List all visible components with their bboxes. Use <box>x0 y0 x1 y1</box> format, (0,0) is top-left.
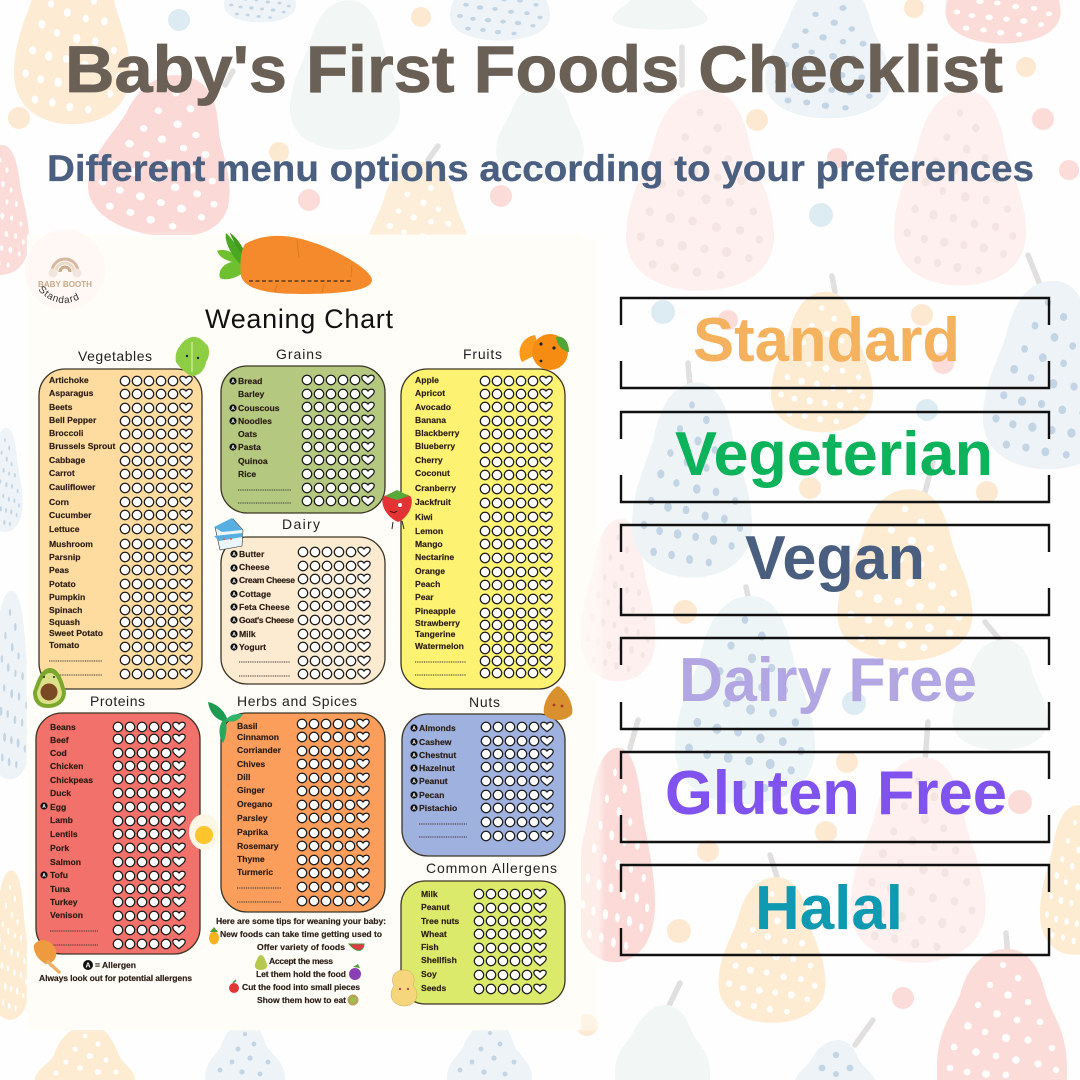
fruits item names: Orange <box>415 566 445 576</box>
herbs item names: Thyme <box>237 854 265 864</box>
heading: vegetables: Vegetables <box>78 348 152 364</box>
vegetables item names: Cauliflower <box>49 482 96 492</box>
allergen legend: Always look out for potential allergens <box>39 973 192 983</box>
proteins item names: Chicken <box>50 761 83 771</box>
allergens item names: Soy <box>421 969 437 979</box>
vegetables item names: Cucumber <box>49 510 92 520</box>
panel: grains <box>221 346 385 513</box>
icon: pineapple <box>209 927 219 944</box>
herbs tracking rows <box>297 719 369 906</box>
nuts item names: Hazelnut <box>419 763 455 773</box>
herbs item names: Chives <box>237 759 265 769</box>
herbs item names: Dill <box>237 772 250 782</box>
proteins item names: Egg <box>50 802 66 812</box>
option: standard: Standard <box>693 306 960 375</box>
vegetables item names: Beets <box>49 402 73 412</box>
proteins item names: Venison <box>50 910 83 920</box>
grains item names: Noodles <box>238 416 272 426</box>
vegetables item names: Potato <box>49 579 76 589</box>
dairy item names: Cream Cheese <box>239 575 295 585</box>
fruits item names: Lemon <box>415 526 443 536</box>
dairy item names: Cheese <box>239 562 270 572</box>
herbs item names: Basil <box>237 721 258 731</box>
fruits item names: Coconut <box>415 468 450 478</box>
vegetables item names: Asparagus <box>49 388 94 398</box>
fruits item names: Pineapple <box>415 606 456 616</box>
grains item names: A <box>231 419 235 425</box>
fruits item names: Cherry <box>415 455 443 465</box>
vegetables item names: Sweet Potato <box>49 628 103 638</box>
vegetables item names: Spinach <box>49 605 82 615</box>
grains item names: A <box>231 445 235 451</box>
nuts item names: A <box>412 726 416 732</box>
vegetables item names <box>49 375 116 675</box>
fruits item names: Apple <box>415 375 439 385</box>
nuts item names: Peanut <box>419 776 448 786</box>
vegetables item names: Tomato <box>49 640 79 650</box>
icon: strawberry <box>382 490 412 529</box>
panel: common allergens <box>401 860 565 1004</box>
proteins item names: Beans <box>50 722 76 732</box>
option: vegan: Vegan <box>745 524 925 593</box>
icon: orange <box>519 334 569 370</box>
option: gluten free: Gluten Free <box>665 759 1007 828</box>
allergens item names: Milk <box>421 889 438 899</box>
vegetables item names: Parsnip <box>49 552 81 562</box>
fruits item names: Banana <box>415 415 446 425</box>
dairy item names: A <box>232 552 236 558</box>
nuts item names: Pecan <box>419 790 444 800</box>
grains item names: A <box>231 379 235 385</box>
fruits item names: Strawberry <box>415 618 460 628</box>
option: gluten free <box>621 752 1049 842</box>
heading: herbs and spices: Herbs and Spices <box>237 693 357 709</box>
vegetables item names: Bell Pepper <box>49 415 97 425</box>
grains item names <box>229 376 291 503</box>
vegetables item names: Broccoli <box>49 428 83 438</box>
dairy item names: Milk <box>239 629 256 639</box>
weaning tips: Let them hold the food <box>256 969 346 979</box>
grains item names: Quinoa <box>238 456 268 466</box>
proteins item names: Lamb <box>50 815 73 825</box>
vegetables item names: Peas <box>49 565 69 575</box>
herbs item names: Corriander <box>237 745 282 755</box>
icon: kiwi <box>348 994 358 1006</box>
allergens item names: Peanut <box>421 902 450 912</box>
herbs item names: Ginger <box>237 785 265 795</box>
panel: dairy <box>221 516 385 684</box>
dairy item names: A <box>232 566 236 572</box>
option: vegeterian: Vegeterian <box>675 420 993 489</box>
allergens item names: Seeds <box>421 983 447 993</box>
herbs item names: Cinnamon <box>237 732 279 742</box>
weaning tips: Cut the food into small pieces <box>242 982 360 992</box>
heading: dairy: Dairy <box>282 516 320 532</box>
dairy item names: Cottage <box>239 589 271 599</box>
proteins tracking rows <box>113 722 185 949</box>
allergen legend: A <box>85 962 91 970</box>
weaning tips: Offer variety of foods <box>257 942 345 952</box>
vegetables tracking rows <box>120 376 192 679</box>
allergens item names: Tree nuts <box>421 916 459 926</box>
weaning chart sheet <box>25 230 602 1032</box>
icon: egg <box>189 814 219 850</box>
nuts item names: A <box>412 806 416 812</box>
nuts item names: A <box>412 740 416 746</box>
icon: almond <box>544 686 572 720</box>
nuts item names: Almonds <box>419 723 456 733</box>
fruits item names: Blueberry <box>415 441 455 451</box>
panel: fruits <box>401 346 565 689</box>
vegetables item names: Corn <box>49 497 69 507</box>
nuts item names: A <box>412 753 416 759</box>
dairy item names: A <box>232 592 236 598</box>
vegetables item names: Brussels Sprout <box>49 441 116 451</box>
option: standard <box>621 298 1049 388</box>
herbs item names: Rosemary <box>237 841 279 851</box>
allergen legend <box>39 960 192 983</box>
vegetables item names: Mushroom <box>49 539 93 549</box>
dairy item names: A <box>232 632 236 638</box>
vegetables item names: Squash <box>49 617 80 627</box>
nuts item names: A <box>412 766 416 772</box>
panel: nuts <box>402 694 565 856</box>
proteins item names <box>40 722 98 945</box>
fruits item names: Avocado <box>415 402 451 412</box>
icon: basil leaves <box>208 702 243 743</box>
grains item names: Bread <box>238 376 262 386</box>
proteins item names: Turkey <box>50 897 78 907</box>
dairy item names: A <box>232 618 236 624</box>
panel: herbs and spices <box>221 693 385 912</box>
herbs item names: Paprika <box>237 827 268 837</box>
grains tracking rows <box>302 375 374 506</box>
proteins item names: A <box>42 873 46 879</box>
fruits item names: Watermelon <box>415 641 464 651</box>
herbs item names: Turmeric <box>237 867 273 877</box>
proteins item names: Lentils <box>50 829 78 839</box>
vegetables item names: Carrot <box>49 468 75 478</box>
logo: baby booth standard <box>25 230 92 304</box>
heading: fruits: Fruits <box>463 346 502 362</box>
icon: avocado <box>33 668 66 708</box>
fruits item names: Nectarine <box>415 552 454 562</box>
fruits item names: Apricot <box>415 388 445 398</box>
fruits item names: Kiwi <box>415 512 433 522</box>
dairy item names: A <box>232 579 236 585</box>
dairy item names: Feta Cheese <box>239 602 290 612</box>
fruits item names: Pear <box>415 592 434 602</box>
grains item names: A <box>231 406 235 412</box>
allergens item names: Fish <box>421 942 439 952</box>
option: vegeterian <box>621 412 1049 502</box>
icon: watermelon <box>349 944 364 950</box>
nuts item names: Cashew <box>419 737 452 747</box>
weaning tips <box>216 916 386 1005</box>
icon: lettuce <box>176 337 209 376</box>
icon: carrot <box>217 232 372 294</box>
grains item names: Oats <box>238 429 257 439</box>
herbs item names: Oregano <box>237 799 272 809</box>
nuts item names <box>410 723 467 837</box>
proteins item names: Cod <box>50 748 67 758</box>
icon: grapes <box>349 964 361 980</box>
fruits item names: Peach <box>415 579 440 589</box>
heading: grains: Grains <box>276 346 322 362</box>
proteins item names: Salmon <box>50 857 81 867</box>
option: dairy free <box>621 638 1049 729</box>
dairy tracking rows <box>298 547 370 679</box>
allergen legend: = Allergen <box>95 960 136 970</box>
nuts item names: A <box>412 793 416 799</box>
weaning tips: Here are some tips for weaning your baby: <box>216 916 386 926</box>
icon: apple <box>229 980 239 993</box>
vegetables item names: Pumpkin <box>49 592 85 602</box>
herbs item names: Parsley <box>237 813 268 823</box>
allergens item names <box>421 889 459 993</box>
icon: pear <box>255 955 267 970</box>
icon: peanut <box>391 970 417 1006</box>
vegetables item names: Cabbage <box>49 455 86 465</box>
fruits item names <box>415 375 466 675</box>
icon: chicken leg <box>34 940 59 972</box>
panel: vegetables <box>39 348 202 689</box>
vegetables item names: Artichoke <box>49 375 89 385</box>
dairy item names: Yogurt <box>239 642 266 652</box>
allergens item names: Shellfish <box>421 955 457 965</box>
logo: baby booth standard: BABY BOOTH <box>38 280 92 289</box>
grains item names: Couscous <box>238 403 280 413</box>
icon: milk carton <box>214 518 243 550</box>
proteins item names: Tuna <box>50 884 70 894</box>
proteins item names: Duck <box>50 788 71 798</box>
nuts item names: A <box>412 779 416 785</box>
proteins item names: Pork <box>50 843 69 853</box>
heading: nuts: Nuts <box>469 694 500 710</box>
chart heading: Weaning Chart <box>205 304 393 334</box>
fruits item names: Tangerine <box>415 629 456 639</box>
allergens item names: Wheat <box>421 929 447 939</box>
dairy item names: A <box>232 645 236 651</box>
dairy item names: Goat's Cheese <box>239 615 294 625</box>
nuts item names: Pistachio <box>419 803 457 813</box>
dairy item names: A <box>232 605 236 611</box>
grains item names: Pasta <box>238 442 261 452</box>
option: dairy free: Dairy Free <box>679 646 977 715</box>
nuts item names: Chestnut <box>419 750 456 760</box>
fruits item names: Blackberry <box>415 428 460 438</box>
fruits item names: Mango <box>415 539 443 549</box>
allergens tracking rows <box>474 889 546 994</box>
option: vegan <box>621 524 1049 615</box>
heading: common allergens: Common Allergens <box>426 860 557 876</box>
grains item names: Barley <box>238 389 264 399</box>
fruits tracking rows <box>480 376 552 678</box>
heading: proteins: Proteins <box>90 693 145 709</box>
proteins item names: A <box>42 804 46 810</box>
title: Baby's First Foods Checklist <box>65 32 1003 106</box>
dairy item names <box>230 549 295 676</box>
fruits item names: Cranberry <box>415 483 456 493</box>
proteins item names: Beef <box>50 735 69 745</box>
logo: baby booth standard: Standard <box>39 286 79 304</box>
subtitle: Different menu options according to your preferences <box>47 148 1034 189</box>
nuts tracking rows <box>481 722 553 841</box>
proteins item names: Chickpeas <box>50 775 93 785</box>
weaning tips: Show them how to eat <box>257 995 346 1005</box>
grains item names: Rice <box>238 469 256 479</box>
fruits item names: Jackfruit <box>415 497 451 507</box>
option: halal <box>621 865 1049 955</box>
herbs item names <box>237 721 282 902</box>
dairy item names: Butter <box>239 549 265 559</box>
weaning tips: New foods can take time getting used to <box>220 929 382 939</box>
weaning tips: Accept the mess <box>269 956 333 966</box>
proteins item names: Tofu <box>50 870 68 880</box>
vegetables item names: Lettuce <box>49 524 80 534</box>
panel: proteins <box>36 693 200 954</box>
option: halal: Halal <box>755 874 903 943</box>
